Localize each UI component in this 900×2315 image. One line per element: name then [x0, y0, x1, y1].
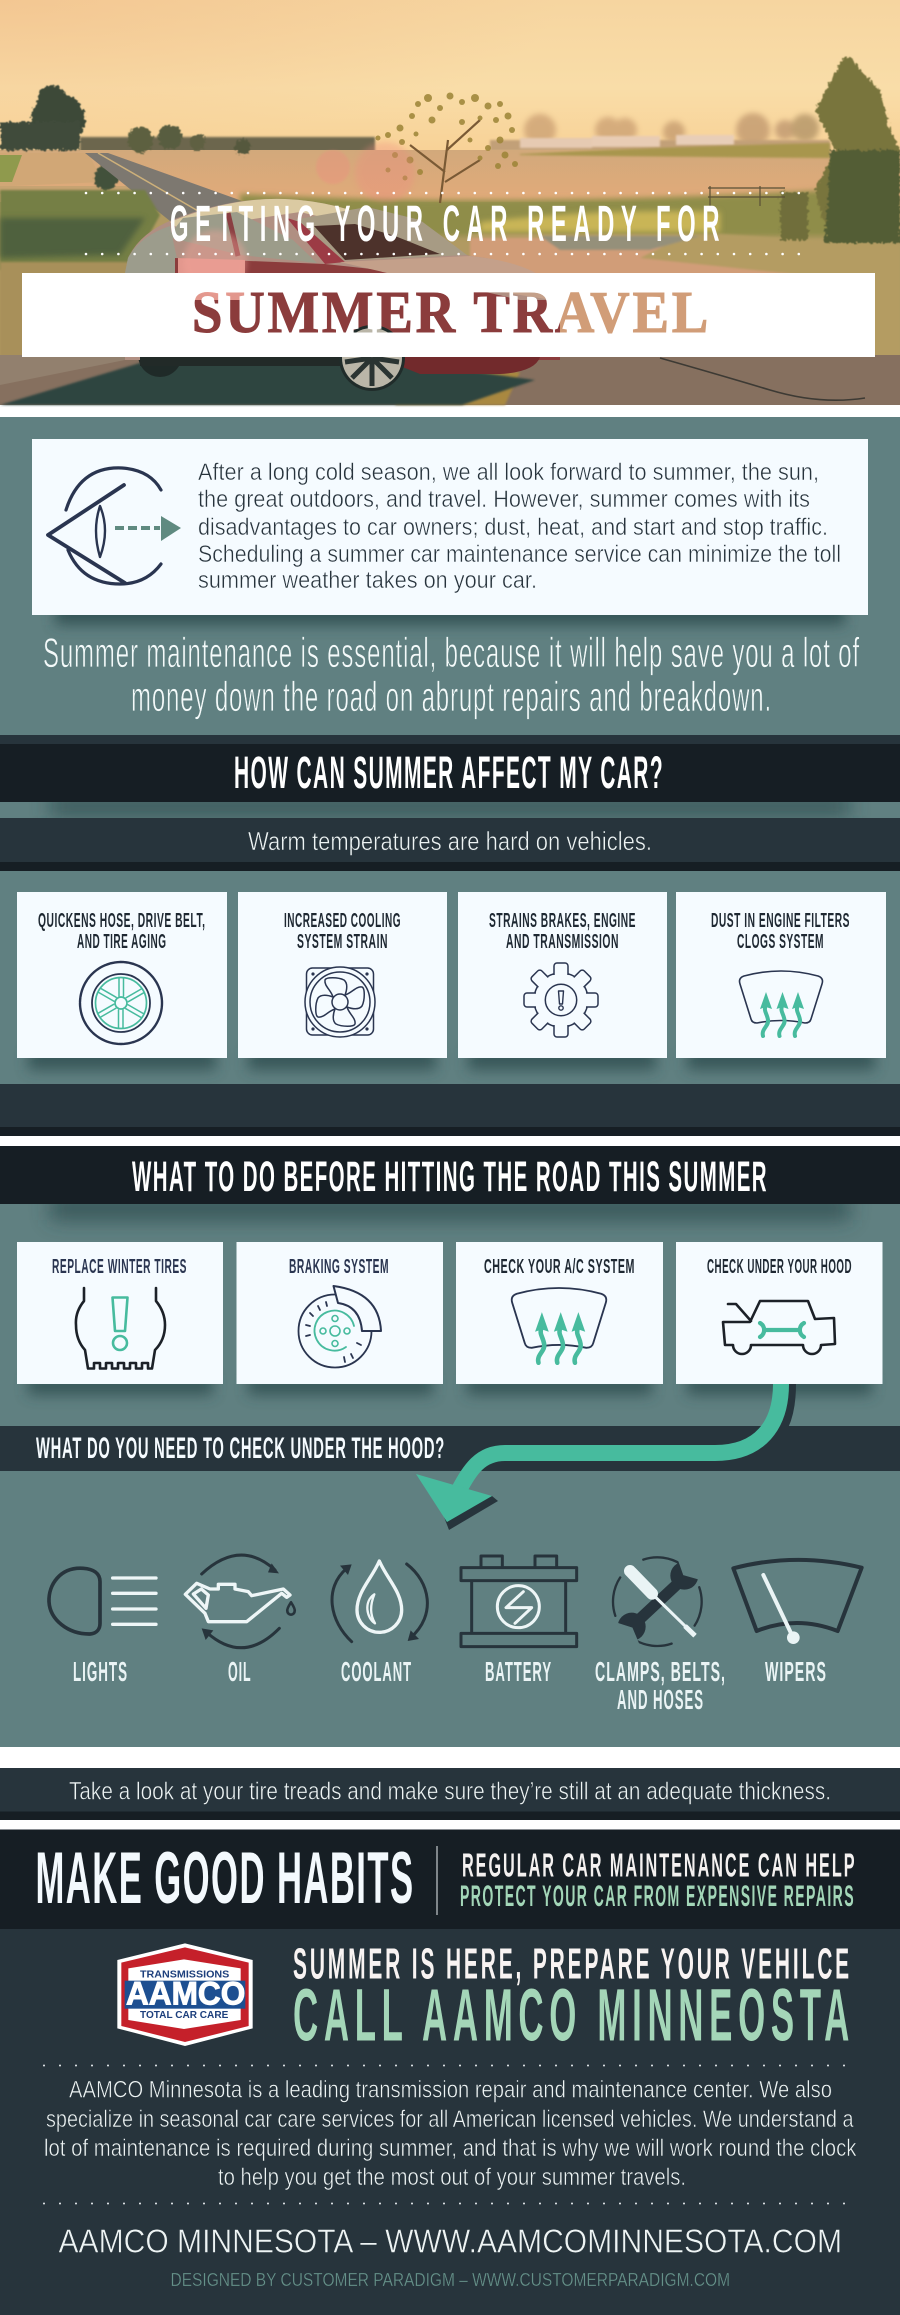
hero dotted rule bottom [86, 253, 815, 255]
icon: coolant [332, 1561, 427, 1642]
band: under the hood [0, 1426, 900, 1471]
call to action [293, 1940, 855, 2056]
logo: AAMCO [117, 1943, 253, 2046]
icon: tools [601, 1545, 714, 1658]
checklist labels: WIPERS [765, 1656, 827, 1687]
dark spacer band [0, 1084, 900, 1136]
logo: AAMCO: AAMCO [126, 1976, 245, 2012]
heading shadow [50, 1196, 850, 1220]
icon: tire [80, 962, 162, 1044]
icon: windshield heat [740, 971, 822, 1036]
icon: gear warning [524, 963, 598, 1037]
card shadows row 1 [28, 1048, 875, 1070]
teal background checklist [0, 1204, 900, 1426]
band: under the hood: WHAT DO YOU NEED TO CHECK UNDER THE HOOD? [36, 1432, 445, 1465]
dotted rule bottom [44, 2202, 857, 2204]
panel: winter tires card [17, 1242, 223, 1384]
subheading band [0, 818, 900, 871]
intro paragraph: disadvantages to car owners; dust, heat, and start and stop traffic. [198, 514, 828, 541]
teal background under the hood [0, 1471, 900, 1747]
card title: SYSTEM STRAIN [297, 931, 388, 953]
intro paragraph [198, 459, 841, 594]
dotted rule top [44, 2064, 857, 2066]
subheading band: Warm temperatures are hard on vehicles. [248, 826, 652, 856]
card title [489, 910, 636, 953]
card title: AND TRANSMISSION [506, 931, 619, 953]
icon: windshield heat [512, 1288, 606, 1363]
card title: AND TIRE AGING [77, 931, 166, 953]
checklist labels: BATTERY [485, 1656, 552, 1687]
checklist labels: COOLANT [341, 1656, 412, 1687]
checklist labels: LIGHTS [73, 1656, 128, 1687]
icon: battery [461, 1556, 577, 1647]
title panel [22, 273, 875, 357]
card title [38, 910, 205, 953]
teal strip below heading [0, 802, 900, 818]
title text: SUMMER TRAVEL [192, 279, 711, 345]
checklist labels: OIL [228, 1656, 252, 1687]
heading band: how can summer affect my car [0, 735, 900, 802]
logo: AAMCO: TOTAL CAR CARE [140, 2010, 228, 2021]
band: make good habits: MAKE GOOD HABITS [36, 1838, 414, 1919]
icon: fan [305, 967, 375, 1037]
hero photo [0, 0, 900, 405]
icon: car hood wrench [723, 1301, 835, 1354]
intro paragraph: summer weather takes on your car. [198, 567, 537, 594]
card title: INCREASED COOLING [284, 910, 401, 932]
card shadows row 2 [28, 1375, 872, 1395]
intro paragraph: the great outdoors, and travel. However, summer comes with its [198, 486, 810, 513]
footer background [0, 1929, 900, 2315]
card title [711, 910, 850, 953]
checklist labels: CLAMPS, BELTS, [595, 1656, 726, 1687]
icon: wipers [733, 1560, 862, 1644]
about paragraph: to help you get the most out of your summer travels. [218, 2164, 686, 2191]
arrow: hood to checklist [416, 1384, 788, 1530]
intro paragraph: After a long cold season, we all look forward to summer, the sun, [198, 459, 819, 486]
card title: STRAINS BRAKES, ENGINE [489, 910, 636, 932]
icon: lights [49, 1568, 156, 1634]
heading shadow [50, 796, 850, 816]
card title: BRAKING SYSTEM [289, 1256, 389, 1278]
panel: cooling card [238, 892, 447, 1058]
panel: intro card [32, 439, 868, 615]
hero dotted rule top [86, 192, 815, 194]
card title: REPLACE WINTER TIRES [52, 1256, 187, 1278]
card title: CHECK YOUR A/C SYSTEM [484, 1256, 635, 1278]
panel: hose card [17, 892, 227, 1058]
card title: QUICKENS HOSE, DRIVE BELT, [38, 910, 205, 932]
logo: AAMCO: TRANSMISSIONS [140, 1969, 229, 1980]
icon: tire warning [76, 1288, 165, 1368]
panel: hood card [676, 1242, 882, 1384]
panel: brakes card [458, 892, 667, 1058]
teal background intro [0, 417, 900, 735]
panel: dust card [676, 892, 886, 1058]
teal background effects [0, 871, 900, 1084]
checklist labels [73, 1656, 827, 1715]
card title [284, 910, 401, 953]
intro statement [43, 629, 860, 720]
about paragraph [44, 2076, 857, 2191]
band: tire tread note [0, 1768, 900, 1820]
icon: brake disc [298, 1286, 381, 1368]
website line: AAMCO MINNESOTA – WWW.AAMCOMINNESOTA.COM [58, 2222, 842, 2260]
panel: braking card [236, 1242, 443, 1384]
icon: oil [185, 1555, 295, 1648]
panel: A/C card [456, 1242, 663, 1384]
intro card shadow [55, 603, 845, 625]
checklist labels: AND HOSES [617, 1684, 704, 1715]
icon: eye with arrow [48, 468, 181, 584]
designer credit: DESIGNED BY CUSTOMER PARADIGM – WWW.CUSTOMERPARADIGM.COM [170, 2270, 730, 2290]
